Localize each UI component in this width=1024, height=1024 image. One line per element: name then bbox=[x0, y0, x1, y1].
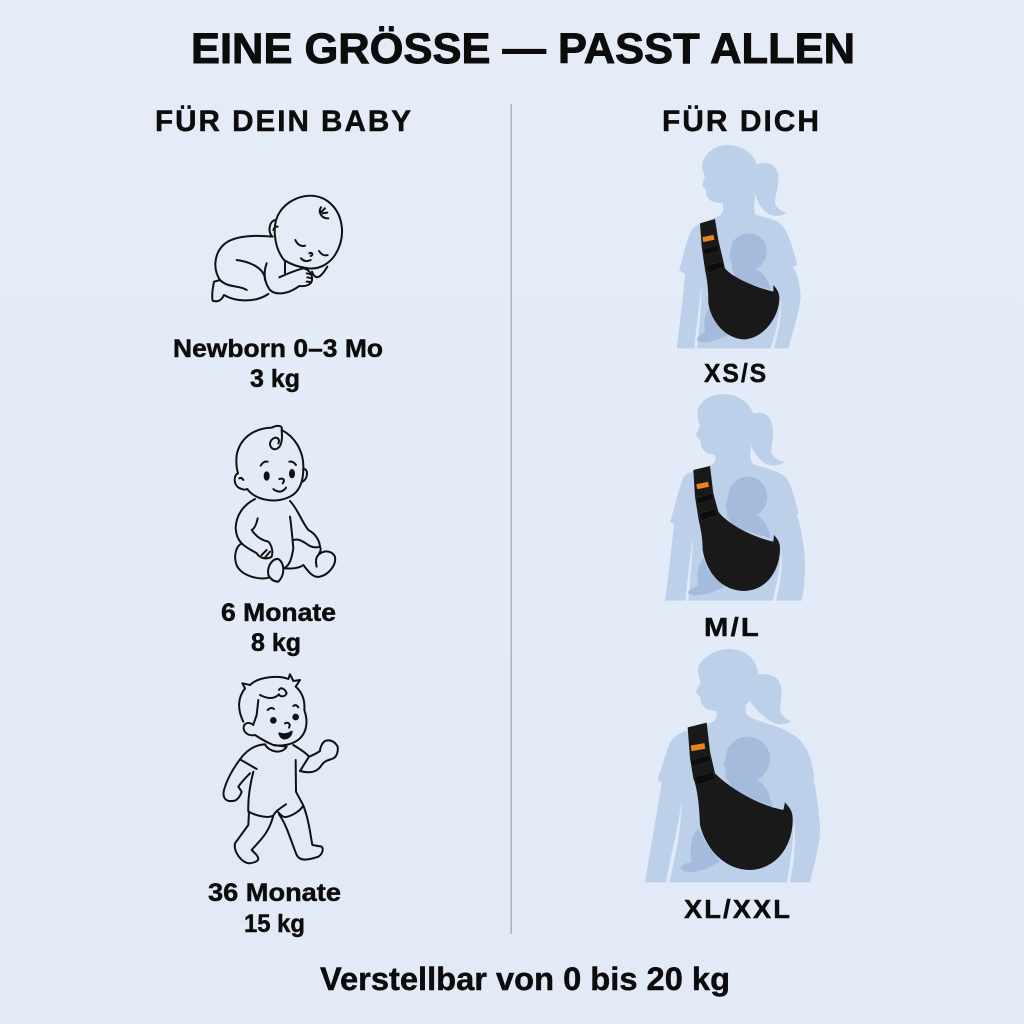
heading: for you: FÜR DICH bbox=[662, 105, 821, 138]
label: M/L: M/L bbox=[704, 612, 761, 642]
label: six months bbox=[221, 599, 336, 657]
figure: size M/L with sling bbox=[665, 394, 805, 601]
panel: baby sizes bbox=[173, 196, 383, 938]
label: six months: 6 Monate bbox=[221, 599, 336, 627]
icon: sleeping newborn bbox=[212, 196, 342, 301]
label: thirty-six months bbox=[208, 879, 341, 938]
label: XL/XXL: XL/XXL bbox=[684, 894, 792, 924]
label: newborn: 3 kg bbox=[250, 365, 300, 393]
label: thirty-six months: 15 kg bbox=[244, 910, 305, 938]
title: EINE GRÖSSE — PASST ALLEN bbox=[191, 25, 855, 73]
label: newborn bbox=[173, 335, 383, 393]
label: XS/S: XS/S bbox=[704, 358, 768, 388]
label: six months: 8 kg bbox=[251, 629, 301, 657]
footer note: Verstellbar von 0 bis 20 kg bbox=[320, 961, 730, 997]
label: thirty-six months: 36 Monate bbox=[208, 879, 341, 907]
icon: walking toddler bbox=[224, 674, 338, 863]
figure: size XL/XXL with sling bbox=[645, 649, 820, 882]
figure: size XS/S with sling bbox=[677, 145, 801, 348]
panel: adult sizes bbox=[645, 145, 820, 924]
label: newborn: Newborn 0–3 Mo bbox=[173, 335, 383, 363]
icon: sitting baby bbox=[235, 426, 335, 582]
heading: for your baby: FÜR DEIN BABY bbox=[155, 105, 413, 138]
